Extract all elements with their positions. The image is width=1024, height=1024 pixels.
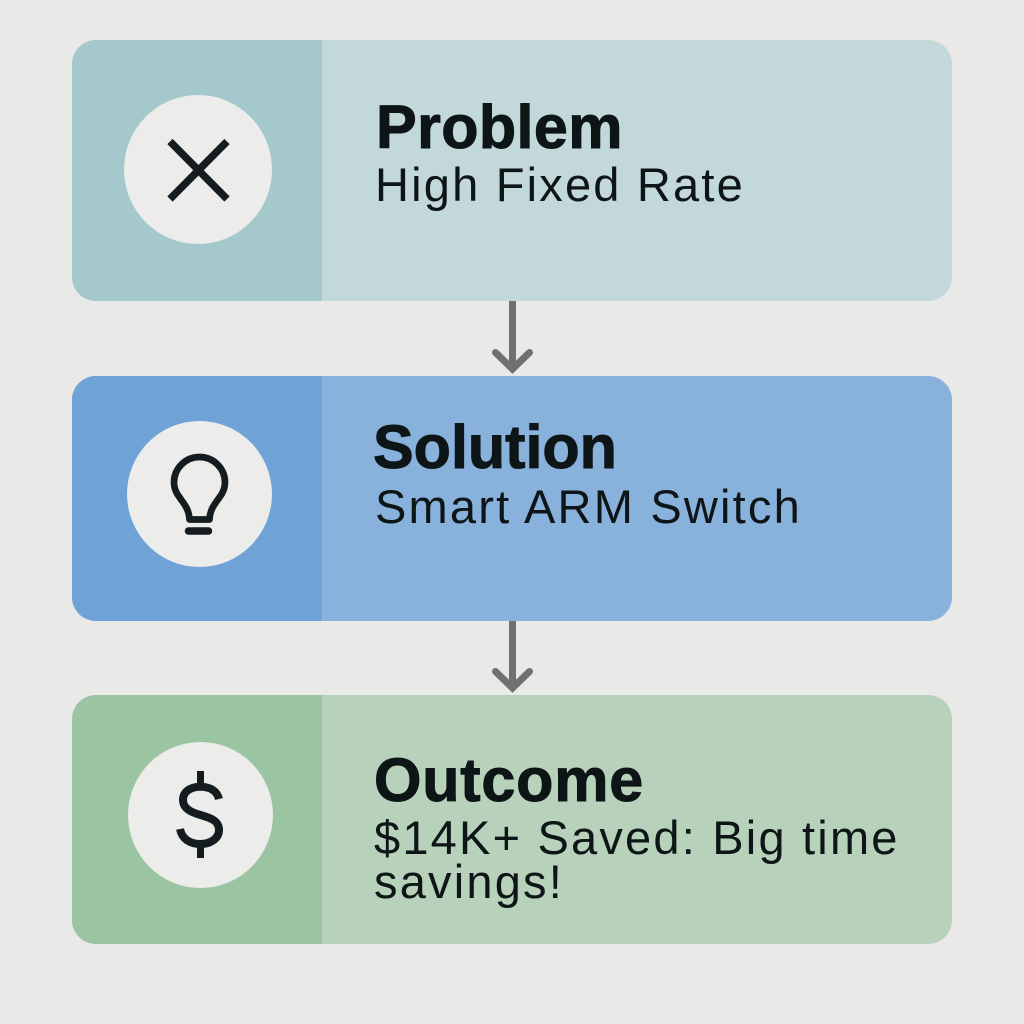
solution text: Smart ARM Switch (375, 480, 802, 533)
problem text: High Fixed Rate (375, 158, 745, 211)
icon: light bulb in circle (127, 421, 272, 567)
outcome text: savings! (374, 855, 564, 908)
arrow: problem to solution (492, 301, 533, 374)
problem icon column (72, 40, 322, 301)
panel: problem (72, 40, 952, 301)
icon: x in circle (124, 95, 272, 244)
problem heading: Problem (376, 93, 623, 161)
solution heading: Solution (373, 413, 617, 481)
outcome icon column (72, 695, 322, 944)
panel: solution (72, 376, 952, 621)
outcome heading: Outcome (374, 746, 644, 814)
arrow: solution to outcome (492, 621, 533, 693)
icon: dollar in circle (128, 742, 273, 888)
outcome text: $14K+ Saved: Big time (374, 811, 900, 864)
outcome text (374, 811, 900, 908)
solution icon column (72, 376, 322, 621)
panel: outcome (72, 695, 952, 944)
